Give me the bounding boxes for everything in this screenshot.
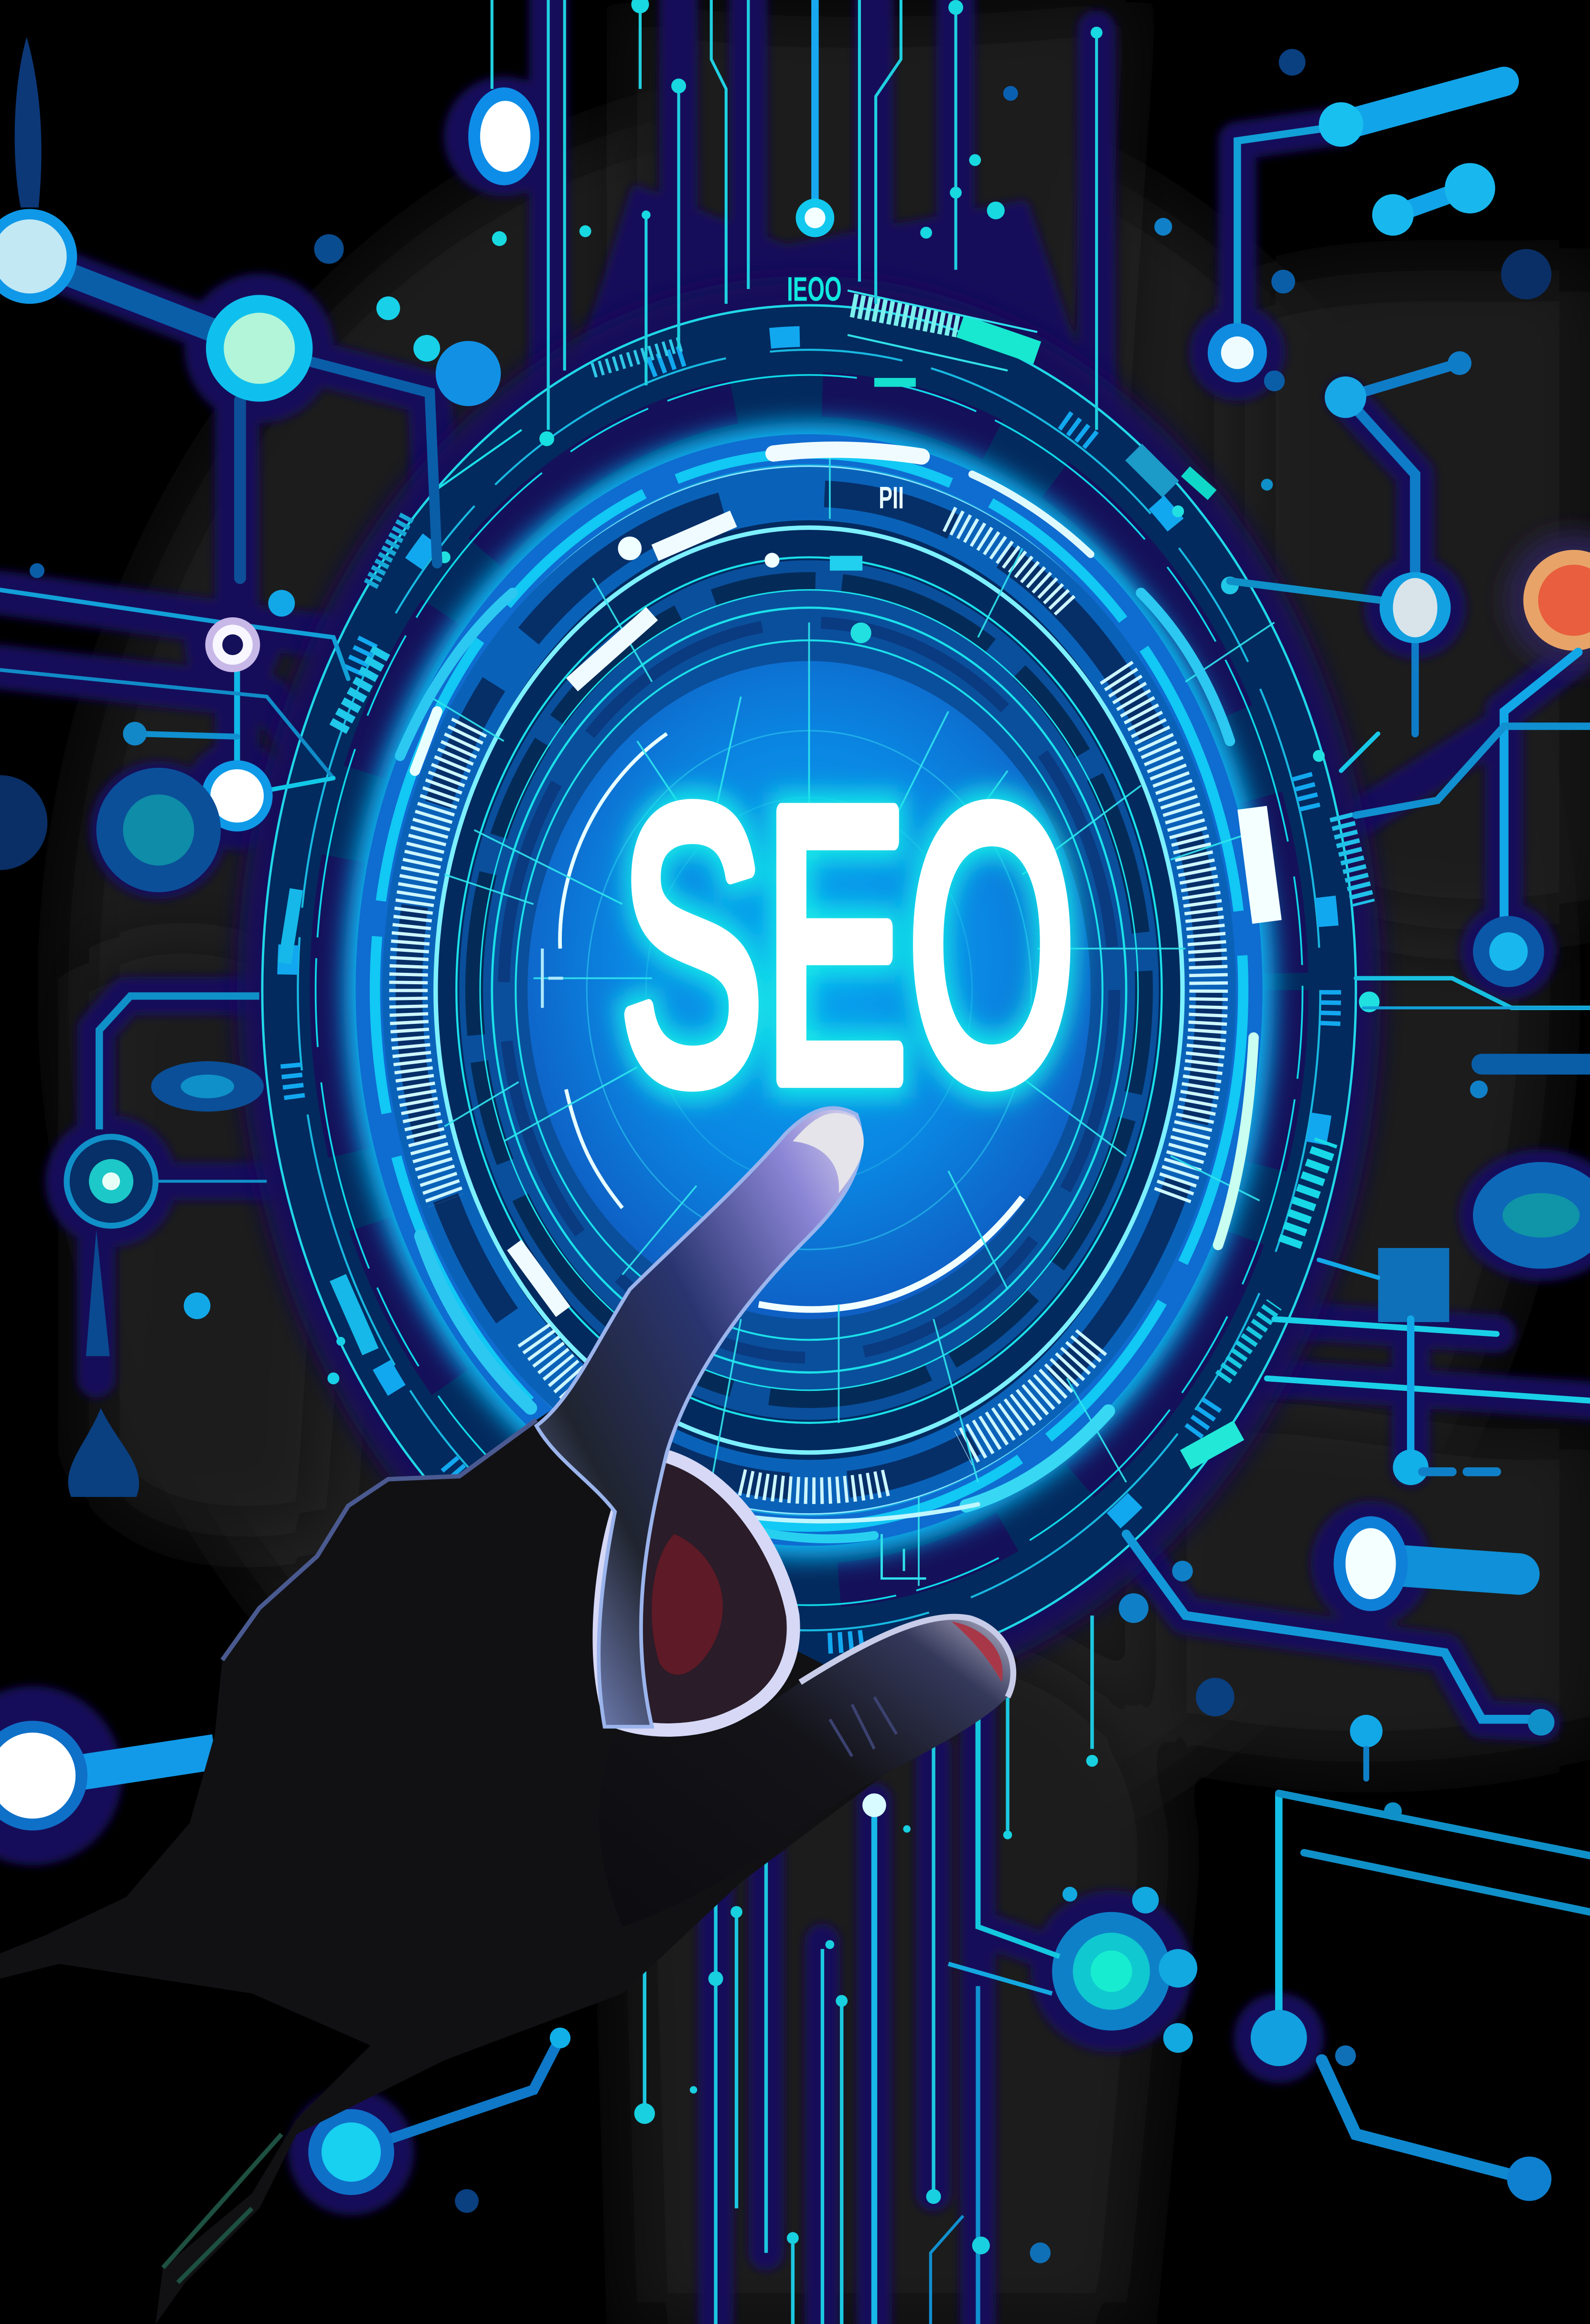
HUD dial: inner dark bands [456, 557, 1162, 1423]
circuit network: middle right [1341, 652, 1590, 1269]
title glow: SEO [619, 728, 1076, 1162]
small HUD label: IEOO [787, 270, 842, 309]
thumb nail accent [951, 1622, 1003, 1682]
HUD dial: outer rings [237, 276, 1381, 1704]
curled middle finger [599, 1455, 794, 1730]
hand rim light [222, 1420, 537, 1660]
circuit nodes: upper left [0, 209, 501, 892]
circuit network: upper right [1154, 49, 1551, 734]
finger shadow accent [652, 1534, 723, 1675]
HUD dial: hatched tick arcs [408, 519, 1209, 1491]
hand pointing at the SEO button [0, 1108, 1018, 2324]
HUD dial: small ticks and data blocks [338, 290, 1363, 1579]
hand silhouette [0, 1364, 1018, 2324]
circuit nodes: bottom [455, 1755, 1098, 2263]
circuit traces: bottom [645, 1615, 1092, 2324]
title: SEO: SEO [619, 728, 1076, 1162]
circuit network: lower left [0, 1721, 570, 2195]
small HUD tick label: PII [879, 480, 904, 515]
HUD dial: central blue disc [527, 661, 1091, 1319]
HUD dial: white and cyan arc segments [285, 382, 1267, 1539]
wrist rim [163, 2134, 281, 2282]
index fingertip highlight [793, 1113, 864, 1193]
circuit traces: top [492, 0, 1096, 430]
orange status node [1505, 532, 1590, 668]
HUD dial: bright glowing ring [370, 449, 1248, 1531]
HUD dial: radial grid lines [430, 445, 1274, 1586]
thumb creases [830, 1697, 896, 1756]
thumb top rim light [800, 1617, 1013, 1697]
circuit nodes: top [468, 0, 1103, 246]
index finger [537, 1108, 861, 1727]
thumb [599, 1617, 1013, 1927]
circuit chip and traces: lower right [1119, 1248, 1590, 1778]
circuit node: teal hub [1052, 1887, 1197, 2053]
circuit network: middle left [67, 996, 345, 1497]
HUD dial: accent dots [439, 431, 1380, 1012]
circuit network: upper left [0, 37, 437, 796]
circuit network: bottom right [1251, 1793, 1590, 2201]
